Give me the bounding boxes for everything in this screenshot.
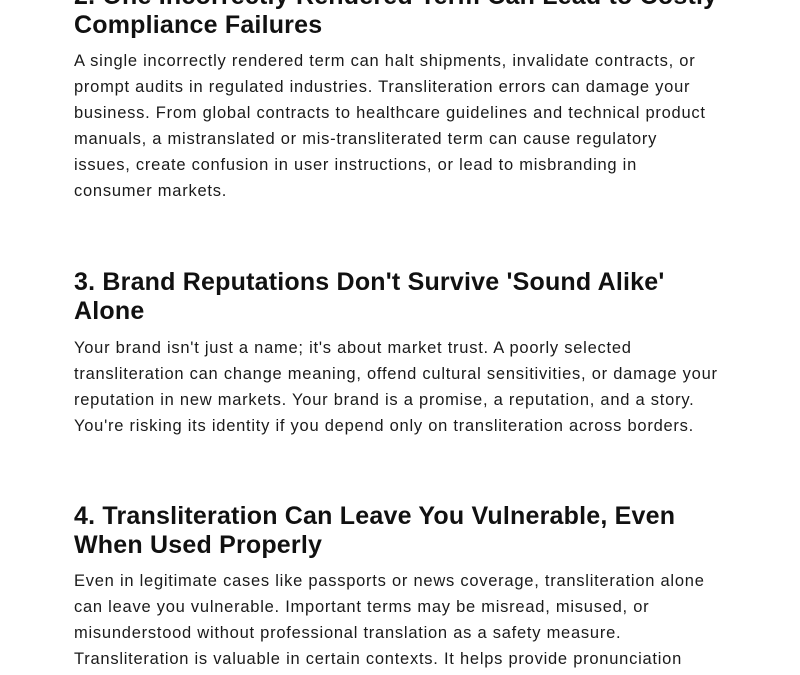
text block: section 4 body: misunderstood without professional translation as a safety measure.	[74, 624, 621, 642]
text block: section 2 body: business. From global contracts to healthcare guidelines and technical product	[74, 104, 706, 122]
text block: section 3 body: Your brand isn't just a name; it's about market trust. A poorly selected	[74, 339, 632, 357]
text block: section 3 body	[74, 339, 718, 435]
heading: section 4: When Used Properly	[74, 531, 322, 559]
text block: section 2 body	[74, 52, 706, 200]
text block: section 3 body: You're risking its identity if you depend only on transliteration across borders.	[74, 417, 694, 435]
text block: section 3 body: transliteration can change meaning, offend cultural sensitivities, or damage your	[74, 365, 718, 383]
text block: section 2 body: prompt audits in regulated industries. Transliteration errors can damage your	[74, 78, 690, 96]
heading: section 3	[74, 268, 664, 325]
text block: section 2 body: consumer markets.	[74, 182, 227, 200]
text block: section 4 body: can leave you vulnerable. Important terms may be misread, misused, or	[74, 598, 649, 616]
text block: section 4 body	[74, 572, 705, 668]
heading: section 4	[74, 502, 675, 559]
text block: section 3 body: reputation in new markets. Your brand is a promise, a reputation, and a story.	[74, 391, 694, 409]
heading: section 2: Compliance Failures	[74, 11, 322, 39]
text block: section 4 body: Transliteration is valuable in certain contexts. It helps provide pronunciation	[74, 650, 682, 668]
text block: section 2 body: manuals, a mistranslated or mis-transliterated term can cause regulatory	[74, 130, 657, 148]
heading: section 2	[74, 0, 717, 39]
text block: section 2 body: issues, create confusion in user instructions, or lead to misbranding in	[74, 156, 637, 174]
heading: section 3: Alone	[74, 297, 144, 325]
heading: section 3: 3. Brand Reputations Don't Survive 'Sound Alike'	[74, 268, 664, 296]
text block: section 2 body: A single incorrectly rendered term can halt shipments, invalidate contracts, or	[74, 52, 695, 70]
heading: section 4: 4. Transliteration Can Leave You Vulnerable, Even	[74, 502, 675, 530]
text block: section 4 body: Even in legitimate cases like passports or news coverage, transliteration alone	[74, 572, 705, 590]
